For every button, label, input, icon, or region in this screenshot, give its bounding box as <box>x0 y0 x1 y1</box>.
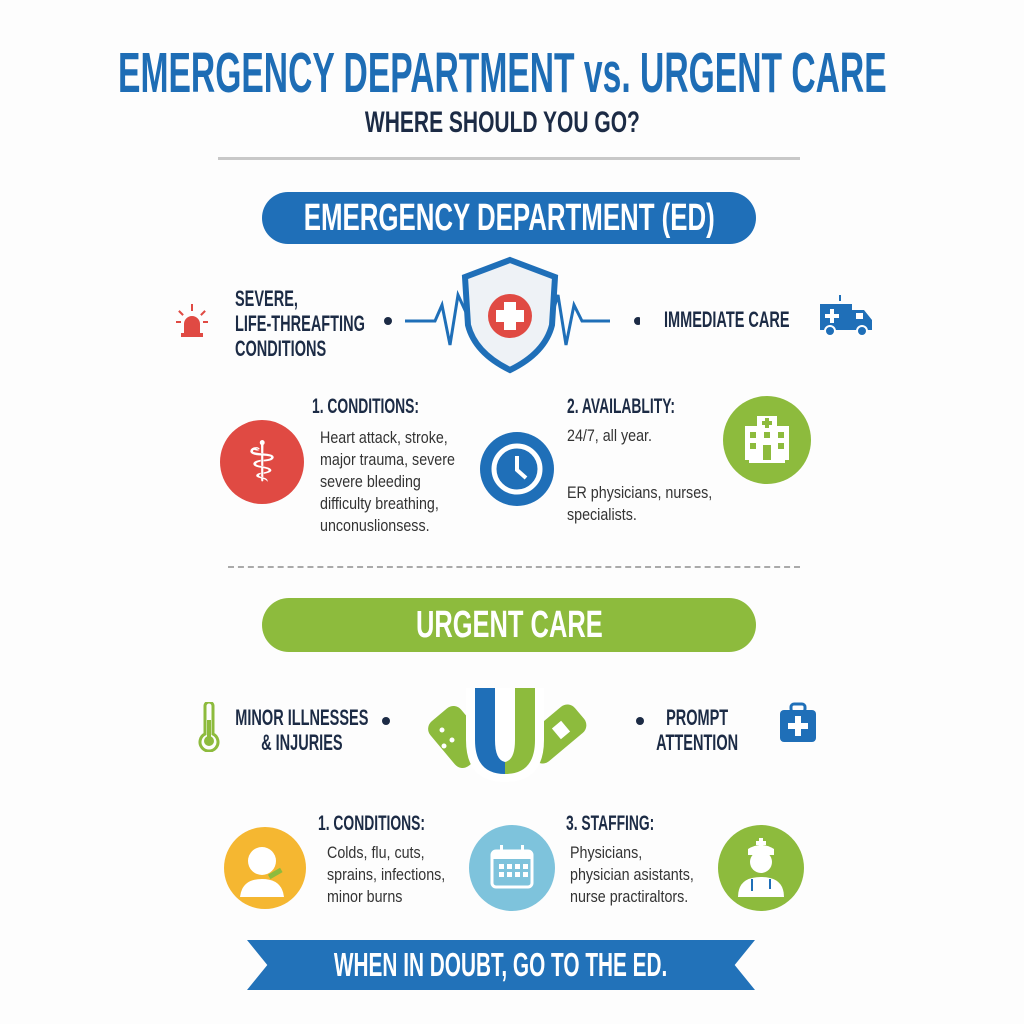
text: ED conditions list: unconuslionsess. <box>320 516 430 535</box>
icon: U logo with bandages <box>382 688 644 774</box>
icon: caduceus red circle <box>220 420 304 504</box>
icon: medical kit <box>780 702 816 742</box>
icon: clock <box>480 432 554 506</box>
subtitle: WHERE SHOULD YOU GO? <box>365 106 639 139</box>
text: prompt attention: PROMPT <box>666 705 728 730</box>
heading: conditions: 1. CONDITIONS: <box>312 395 419 418</box>
icon: calendar light blue circle <box>469 825 555 911</box>
text: UC staffing <box>570 843 694 906</box>
icon: hospital green circle <box>723 396 811 484</box>
ED conditions block <box>220 395 455 535</box>
title: EMERGENCY DEPARTMENT vs. URGENT CARE <box>118 41 886 105</box>
text: UC conditions list: Colds, flu, cuts, <box>327 843 425 862</box>
staffing block <box>566 812 694 906</box>
text: ED conditions list: difficulty breathing, <box>320 494 439 513</box>
text: ED conditions list: major trauma, severe <box>320 450 455 469</box>
icon: thermometer <box>198 702 220 752</box>
heading: urgent care pill: URGENT CARE <box>416 604 602 646</box>
icon: sick person yellow circle <box>224 827 306 909</box>
text: ED staffing <box>567 483 712 524</box>
text: minor illnesses: & INJURIES <box>261 730 343 755</box>
text: UC conditions list <box>327 843 445 906</box>
text: UC staffing: physician asistants, <box>570 865 694 884</box>
UC conditions block <box>224 812 445 909</box>
text: UC staffing: nurse practiraltors. <box>570 887 688 906</box>
text: severe conditions <box>235 286 365 361</box>
text: availability: 24/7, all year. <box>567 426 652 445</box>
text: ED conditions list: severe bleeding <box>320 472 421 491</box>
text: severe conditions: CONDITIONS <box>235 336 326 361</box>
heading: emergency department pill <box>262 192 756 244</box>
text: immediate care: IMMEDIATE CARE <box>664 307 790 332</box>
text: ED staffing: ER physicians, nurses, <box>567 483 712 502</box>
availability block <box>567 395 712 524</box>
text: minor illnesses: MINOR ILLNESSES <box>235 705 369 730</box>
text: prompt attention: ATTENTION <box>656 730 738 755</box>
text: UC conditions list: minor burns <box>327 887 402 906</box>
heading: emergency department pill: EMERGENCY DEPARTMENT (ED) <box>303 197 715 239</box>
heading: staffing: 3. STAFFING: <box>566 812 654 835</box>
heading: availability: 2. AVAILABLITY: <box>567 395 675 418</box>
heading: urgent care pill <box>262 598 756 652</box>
text: minor illnesses <box>235 705 369 755</box>
icon: doctor green circle <box>718 825 804 911</box>
text: ED conditions list: Heart attack, stroke, <box>320 428 448 447</box>
icon: ambulance <box>820 295 872 335</box>
icon: caduceus red circle: ⚕ <box>247 430 277 493</box>
text: prompt attention <box>656 705 738 755</box>
text: UC staffing: Physicians, <box>570 843 642 862</box>
text: ED staffing: specialists. <box>567 505 637 524</box>
icon: siren <box>176 304 208 337</box>
text: severe conditions: SEVERE, <box>235 286 298 311</box>
icon: shield with heartbeat <box>384 256 640 374</box>
text: UC conditions list: sprains, infections, <box>327 865 445 884</box>
heading: conditions: 1. CONDITIONS: <box>318 812 425 835</box>
banner: when in doubt: WHEN IN DOUBT, GO TO THE ED. <box>334 946 668 983</box>
text: ED conditions list <box>320 428 455 535</box>
text: severe conditions: LIFE-THREAFTING <box>235 311 365 336</box>
banner: when in doubt <box>247 940 755 990</box>
